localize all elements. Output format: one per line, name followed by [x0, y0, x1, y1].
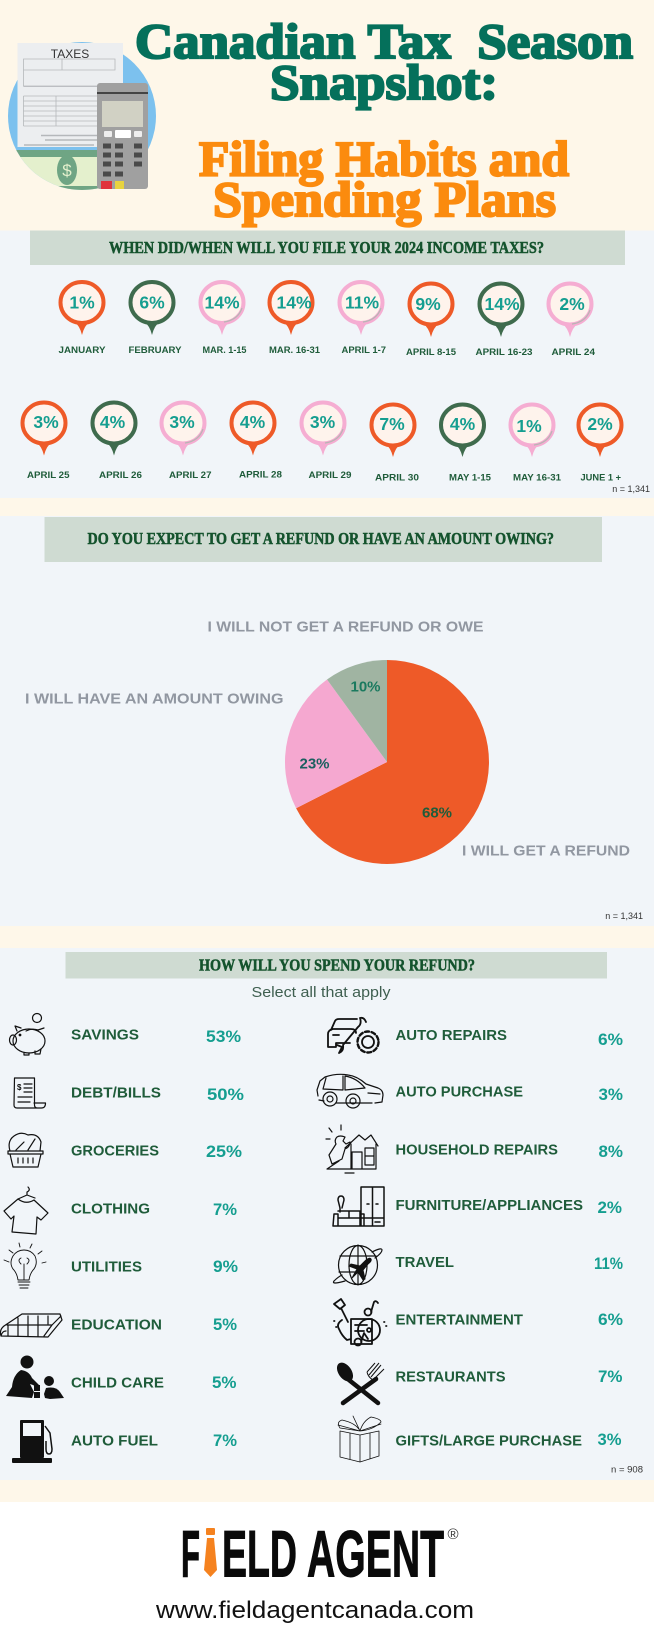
- pin: June 1+ 2%: 2%: [587, 414, 613, 434]
- row: auto repairs: [328, 1018, 623, 1053]
- row: clothing: [4, 1187, 237, 1234]
- row: furniture/appliances: 2%: [598, 1199, 622, 1217]
- pin: April 29 3%: [302, 402, 344, 456]
- pin: January 1%: [60, 282, 104, 335]
- icon: adult and child with blocks: [6, 1356, 64, 1399]
- row: furniture/appliances: [333, 1187, 622, 1226]
- heading bar: filing timing: [30, 230, 625, 265]
- pin: April 1-7 11%: 11%: [345, 292, 379, 312]
- icon: tax form and calculator illustration: $: [62, 161, 72, 180]
- date labels: first row: MAR. 1-15: [202, 345, 247, 356]
- date labels: second row: APRIL 29: [308, 470, 352, 481]
- pin: April 16-23 14%: [480, 284, 522, 337]
- sample size note: n = 1,341: [605, 911, 643, 921]
- pin: April 28 4%: [232, 402, 274, 456]
- icon: piggy bank: [10, 1014, 45, 1055]
- pin: April 8-15 9%: [410, 284, 452, 337]
- date labels: first row: APRIL 24: [552, 347, 596, 358]
- heading bar: refund spending: HOW WILL YOU SPEND YOUR REFUND?: [199, 956, 475, 974]
- row: debt/bills: 50%: [207, 1086, 244, 1104]
- pin: April 27 3%: 3%: [169, 412, 195, 432]
- website URL: www.fieldagentcanada.com: [155, 1597, 474, 1624]
- row: education: [0, 1314, 237, 1337]
- row: gifts/large purchase: GIFTS/LARGE PURCHASE: [396, 1434, 582, 1450]
- icon: t-shirt on hanger: [4, 1187, 48, 1234]
- date labels: first row: APRIL 16-23: [476, 347, 532, 358]
- date labels: second row: JUNE 1 +: [580, 472, 621, 484]
- row: household repairs: 8%: [598, 1143, 623, 1161]
- pin: Mar 16-31 14%: [270, 282, 312, 335]
- icon: grocery basket: [8, 1133, 43, 1167]
- icon: orange tie letter i: [204, 1528, 217, 1577]
- pin: April 24 2%: [548, 284, 592, 337]
- row: entertainment: ENTERTAINMENT: [396, 1312, 523, 1328]
- row: gifts/large purchase: [338, 1416, 622, 1462]
- date labels: second row: APRIL 26: [99, 470, 142, 481]
- pin: Mar 1-15 14%: 14%: [204, 292, 240, 312]
- pin: May 1-15 4%: 4%: [450, 414, 476, 434]
- pin: April 24 2%: 2%: [559, 294, 585, 314]
- logo: Field Agent: F: [181, 1516, 200, 1590]
- date labels: first row: APRIL 1-7: [342, 345, 386, 356]
- pin: Mar 1-15 14%: [200, 282, 244, 335]
- panel: refund expectation: [0, 516, 654, 926]
- row: savings: SAVINGS: [71, 1028, 139, 1044]
- row: child care: [6, 1356, 237, 1399]
- row: restaurants: 7%: [598, 1368, 623, 1386]
- row: child care: 5%: [212, 1374, 237, 1392]
- date labels: first row: APRIL 8-15: [406, 347, 457, 358]
- icon: fuel pump: [12, 1420, 52, 1463]
- header: [8, 13, 633, 227]
- heading bar: refund expectation: DO YOU EXPECT TO GET A REFUND OR HAVE AN AMOUNT OWING?: [88, 529, 554, 548]
- icon: sofa, lamp and wardrobe: [333, 1187, 384, 1226]
- icon: tax form and calculator illustration: [8, 42, 156, 195]
- pin: February 6%: 6%: [139, 292, 165, 312]
- pin: April 30 7%: 7%: [379, 414, 405, 434]
- row: restaurants: [334, 1360, 623, 1403]
- pie chart: 10%: [350, 678, 381, 696]
- row: clothing: CLOTHING: [71, 1202, 150, 1218]
- row: savings: [10, 1014, 241, 1055]
- row: utilities: [4, 1243, 238, 1288]
- row: entertainment: [334, 1299, 623, 1346]
- row: savings: 53%: [206, 1028, 241, 1046]
- pie label: refund: I WILL GET A REFUND: [462, 842, 630, 860]
- icon: spoon and fork: [334, 1360, 384, 1403]
- row: travel: 11%: [594, 1255, 623, 1273]
- row: groceries: GROCERIES: [71, 1144, 159, 1160]
- panel: refund spending: [0, 948, 654, 1480]
- pin: May 16-31 1%: [510, 404, 554, 457]
- date labels: second row: APRIL 30: [375, 472, 419, 484]
- row: education: 5%: [213, 1316, 237, 1334]
- pin: April 26 4%: [92, 402, 136, 456]
- pie label: no refund: I WILL NOT GET A REFUND OR OWE: [208, 618, 484, 636]
- subheading: Select all that apply: [252, 985, 391, 1001]
- pin: June 1+ 2%: [578, 404, 622, 457]
- date labels: second row: MAY 1-15: [449, 472, 492, 484]
- panel: filing timing: [0, 230, 654, 498]
- icon: gift box: [338, 1416, 381, 1462]
- pin: April 1-7 11%: [340, 282, 382, 335]
- row: groceries: 25%: [206, 1143, 242, 1161]
- pin: April 26 4%: 4%: [100, 412, 126, 432]
- row: restaurants: RESTAURANTS: [396, 1370, 506, 1386]
- row: debt/bills: [14, 1078, 244, 1108]
- pie chart: 68%: [422, 804, 452, 822]
- date labels: second row: APRIL 27: [169, 470, 212, 481]
- date labels: first row: MAR. 16-31: [269, 345, 321, 356]
- row: utilities: UTILITIES: [71, 1260, 142, 1276]
- title: [135, 13, 633, 110]
- row: clothing: 7%: [213, 1201, 237, 1219]
- date labels: first row: FEBRUARY: [128, 345, 182, 356]
- pie chart: [285, 660, 489, 864]
- icon: tax form and calculator illustration: TAXES: [51, 47, 89, 61]
- pin: April 8-15 9%: 9%: [415, 294, 441, 314]
- logo: Field Agent: ELD: [222, 1516, 297, 1590]
- pin: May 1-15 4%: [441, 404, 484, 457]
- logo: Field Agent: AGENT: [307, 1516, 444, 1590]
- title: Snapshot:: [270, 54, 498, 110]
- row: gifts/large purchase: 3%: [598, 1431, 622, 1449]
- pin: April 30 7%: [372, 404, 414, 457]
- pin: April 25 3%: 3%: [33, 412, 59, 432]
- row: child care: CHILD CARE: [71, 1376, 164, 1392]
- row: debt/bills: DEBT/BILLS: [71, 1086, 161, 1102]
- row: debt/bills: $: [17, 1083, 22, 1092]
- icon: stacked books: [0, 1314, 62, 1337]
- row: auto repairs: 6%: [598, 1031, 623, 1049]
- row: auto purchase: AUTO PURCHASE: [396, 1084, 523, 1100]
- heading bar: refund expectation: [44, 517, 602, 562]
- date labels: second row: APRIL 25: [27, 470, 70, 481]
- pin: May 16-31 1%: 1%: [516, 416, 542, 436]
- icon: light bulb: [4, 1243, 46, 1288]
- row: travel: [333, 1245, 623, 1285]
- pin: Mar 16-31 14%: 14%: [276, 292, 312, 312]
- row: auto repairs: AUTO REPAIRS: [396, 1028, 507, 1044]
- subtitle: [199, 130, 569, 227]
- pin: April 27 3%: [162, 402, 204, 456]
- logo: Field Agent: ®: [447, 1526, 459, 1543]
- title: Canadian Tax Season: [135, 13, 633, 69]
- pin: April 16-23 14%: 14%: [484, 294, 520, 314]
- row: auto fuel: [12, 1420, 237, 1463]
- subtitle: Filing Habits and: [199, 130, 569, 186]
- pin: April 25 3%: [22, 402, 66, 456]
- heading bar: refund spending: [66, 952, 607, 978]
- icon: guitar, notes and disc: [334, 1299, 386, 1346]
- icon: car with wrench and gear: [328, 1018, 378, 1053]
- row: auto purchase: [317, 1074, 623, 1108]
- pie chart: 23%: [299, 756, 330, 772]
- row: auto fuel: 7%: [213, 1432, 237, 1450]
- row: travel: TRAVEL: [396, 1255, 454, 1271]
- icon: SUV: [317, 1074, 383, 1108]
- pie label: amount owing: I WILL HAVE AN AMOUNT OWING: [25, 690, 284, 708]
- date labels: second row: MAY 16-31: [513, 472, 562, 484]
- subtitle: Spending Plans: [213, 171, 556, 227]
- pin: April 28 4%: 4%: [240, 412, 266, 432]
- pin: February 6%: [130, 282, 174, 335]
- row: household repairs: [326, 1125, 623, 1173]
- date labels: second row: [27, 470, 621, 484]
- heading bar: filing timing: WHEN DID/WHEN WILL YOU FILE YOUR 2024 INCOME TAXES?: [109, 238, 544, 257]
- row: entertainment: 6%: [598, 1311, 623, 1329]
- date labels: second row: APRIL 28: [239, 470, 282, 480]
- icon: bill: [14, 1078, 46, 1108]
- icon: house and wrench: [326, 1125, 378, 1173]
- row: groceries: [8, 1133, 242, 1167]
- row: household repairs: HOUSEHOLD REPAIRS: [396, 1142, 558, 1158]
- row: furniture/appliances: FURNITURE/APPLIANCES: [396, 1198, 583, 1214]
- row: auto fuel: AUTO FUEL: [71, 1434, 158, 1450]
- row: utilities: 9%: [213, 1258, 238, 1276]
- date labels: first row: JANUARY: [58, 345, 106, 356]
- icon: globe and plane: [333, 1245, 382, 1285]
- sample size note: n = 1,341: [612, 484, 650, 494]
- sample size note: n = 908: [611, 1464, 643, 1476]
- logo: Field Agent: [181, 1516, 459, 1590]
- row: auto purchase: 3%: [598, 1086, 623, 1104]
- pin: January 1%: 1%: [69, 292, 95, 312]
- pin: April 29 3%: 3%: [310, 412, 336, 432]
- row: education: EDUCATION: [71, 1318, 162, 1334]
- date labels: first row: [58, 345, 596, 358]
